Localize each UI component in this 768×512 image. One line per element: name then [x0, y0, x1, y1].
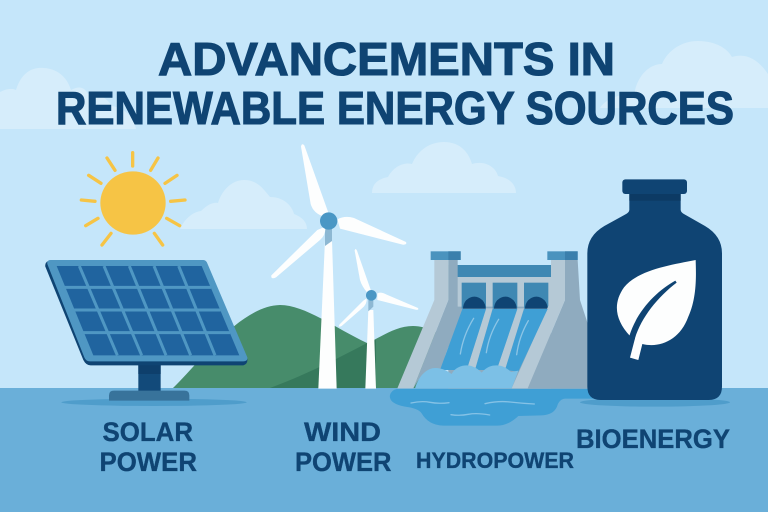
bottle shadow: [580, 398, 730, 407]
title: [56, 33, 734, 134]
icon: leaf: [617, 260, 696, 360]
pond ripples: [411, 402, 534, 415]
cloud: behind sun: [180, 180, 307, 229]
label: solar power: SOLAR: [102, 417, 193, 447]
title: ADVANCEMENTS IN: [158, 33, 615, 85]
icon: bottle: [587, 179, 722, 400]
panel: wind power: [271, 144, 418, 389]
small wind turbine: [339, 249, 418, 389]
stand and base shadow: [61, 363, 247, 406]
label: wind power: WIND: [304, 417, 381, 447]
label: solar power: POWER: [100, 447, 197, 477]
label: wind power: POWER: [295, 447, 392, 477]
foam splash: [415, 365, 518, 388]
icon: sun: [81, 153, 185, 245]
water spillways: [440, 309, 548, 372]
pond: [390, 389, 598, 426]
cloud: top left: [0, 68, 136, 129]
cloud: top right: [600, 41, 768, 108]
green hills: [173, 305, 436, 388]
large wind turbine: [271, 144, 406, 389]
solar panel: [45, 260, 247, 365]
panel: hydropower: [390, 251, 598, 426]
label: bioenergy: BIOENERGY: [576, 424, 730, 454]
panel: bioenergy: [580, 179, 730, 407]
cloud: middle: [372, 142, 516, 193]
label: hydropower: HYDROPOWER: [416, 448, 574, 473]
label: solar power: [100, 417, 197, 477]
dam structure: [397, 251, 588, 389]
panel: solar power: [45, 153, 247, 406]
water: [0, 388, 768, 512]
label: wind power: [295, 417, 392, 477]
